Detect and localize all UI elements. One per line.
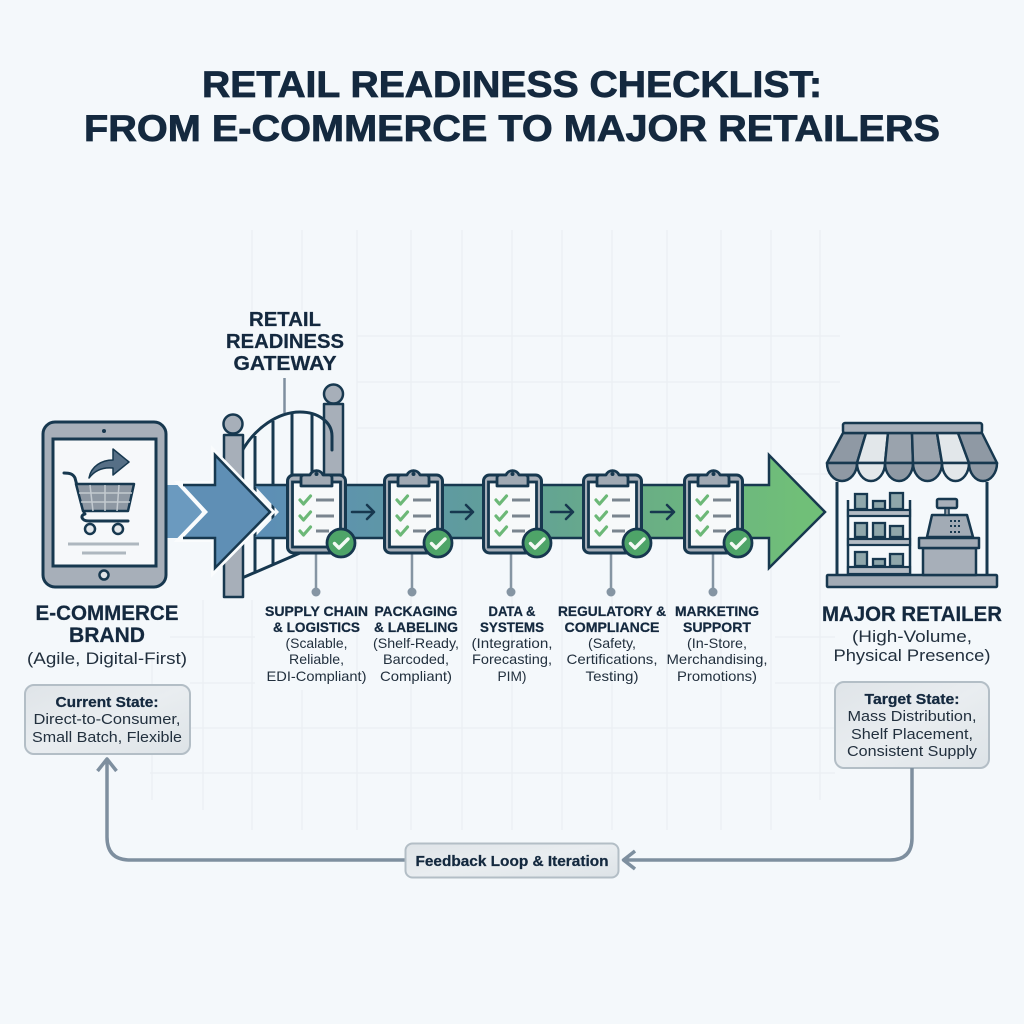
icon: checklist 5 bbox=[684, 471, 752, 557]
icon: storefront bbox=[827, 423, 997, 587]
step text: marketing bbox=[666, 603, 768, 684]
gateway label: GATEWAY bbox=[234, 353, 337, 375]
step text: data: Forecasting, bbox=[472, 651, 552, 667]
flow arrow: blue head bbox=[183, 455, 270, 568]
step text: regulatory bbox=[558, 603, 666, 684]
target state box: Shelf Placement, bbox=[851, 727, 973, 743]
step text: data: DATA & bbox=[488, 603, 536, 619]
icon: checklist 3 bbox=[484, 471, 551, 557]
step text: marketing: SUPPORT bbox=[683, 619, 751, 635]
step text: marketing: MARKETING bbox=[675, 603, 759, 619]
step text: data bbox=[472, 603, 552, 684]
step text: packaging: Compliant) bbox=[380, 668, 452, 684]
icon: checklist 1 bbox=[288, 471, 355, 557]
shelf unit bbox=[848, 493, 910, 575]
step text: regulatory: REGULATORY & bbox=[558, 603, 666, 619]
current state box bbox=[25, 685, 190, 754]
current state box: Small Batch, Flexible bbox=[32, 730, 182, 746]
target state box: Mass Distribution, bbox=[848, 709, 976, 725]
step text: marketing: Promotions) bbox=[677, 668, 757, 684]
cash register bbox=[919, 499, 979, 575]
feedback loop box: Feedback Loop & Iteration bbox=[416, 854, 608, 870]
step text: packaging: Barcoded, bbox=[383, 651, 449, 667]
arrow: feedback to current state bbox=[98, 759, 405, 860]
step text: marketing: (In-Store, bbox=[687, 635, 747, 651]
step text: packaging: (Shelf-Ready, bbox=[373, 635, 459, 651]
icon: checklist 2 bbox=[384, 471, 452, 557]
step text: marketing: Merchandising, bbox=[666, 651, 768, 667]
step text: data: PIM) bbox=[498, 668, 526, 684]
source label bbox=[27, 602, 187, 668]
title bbox=[84, 64, 940, 149]
destination label: (High-Volume, bbox=[852, 627, 972, 646]
step text: supply chain: (Scalable, bbox=[286, 635, 348, 651]
step text: regulatory: COMPLIANCE bbox=[564, 619, 660, 635]
step text: supply chain bbox=[265, 603, 368, 684]
step text: data: SYSTEMS bbox=[480, 619, 544, 635]
pins bbox=[312, 553, 718, 596]
destination label: Physical Presence) bbox=[834, 646, 990, 665]
step text: supply chain: EDI-Compliant) bbox=[266, 668, 366, 684]
step text: supply chain: SUPPLY CHAIN bbox=[265, 603, 368, 619]
step text: data: (Integration, bbox=[472, 635, 552, 651]
step text: supply chain: Reliable, bbox=[289, 651, 344, 667]
gateway label: READINESS bbox=[226, 331, 344, 353]
title: RETAIL READINESS CHECKLIST: bbox=[202, 64, 822, 105]
step text: packaging: PACKAGING bbox=[374, 603, 458, 619]
flow arrow: intake stub bbox=[167, 485, 202, 538]
current state box: Direct-to-Consumer, bbox=[34, 712, 180, 728]
target state box bbox=[835, 682, 989, 768]
step text: regulatory: Certifications, bbox=[566, 651, 658, 667]
title: FROM E-COMMERCE TO MAJOR RETAILERS bbox=[84, 108, 940, 149]
arrow: target state to feedback bbox=[624, 768, 912, 869]
destination label bbox=[822, 603, 1002, 665]
step text: packaging bbox=[373, 603, 459, 684]
target state box: Target State: bbox=[864, 692, 960, 708]
step arrows bbox=[352, 505, 674, 519]
source label: E-COMMERCE bbox=[36, 602, 178, 625]
step text: regulatory: Testing) bbox=[586, 668, 638, 684]
feedback loop box bbox=[406, 844, 618, 878]
step text: supply chain: & LOGISTICS bbox=[273, 619, 360, 635]
step text: regulatory: (Safety, bbox=[588, 635, 636, 651]
icon: checklist 4 bbox=[584, 471, 651, 557]
icon: tablet with cart bbox=[43, 422, 166, 587]
icon: gate bbox=[224, 384, 343, 597]
step text: packaging: & LABELING bbox=[374, 619, 458, 635]
flow arrow: gradient band and green head bbox=[254, 455, 825, 568]
target state box: Consistent Supply bbox=[847, 744, 978, 760]
destination label: MAJOR RETAILER bbox=[822, 603, 1002, 626]
gateway label bbox=[226, 309, 344, 375]
gateway label: RETAIL bbox=[249, 309, 321, 331]
source label: (Agile, Digital-First) bbox=[27, 649, 187, 668]
current state box: Current State: bbox=[56, 695, 158, 711]
source label: BRAND bbox=[69, 624, 145, 647]
gateway connector line bbox=[283, 378, 286, 413]
awning bbox=[827, 423, 997, 481]
